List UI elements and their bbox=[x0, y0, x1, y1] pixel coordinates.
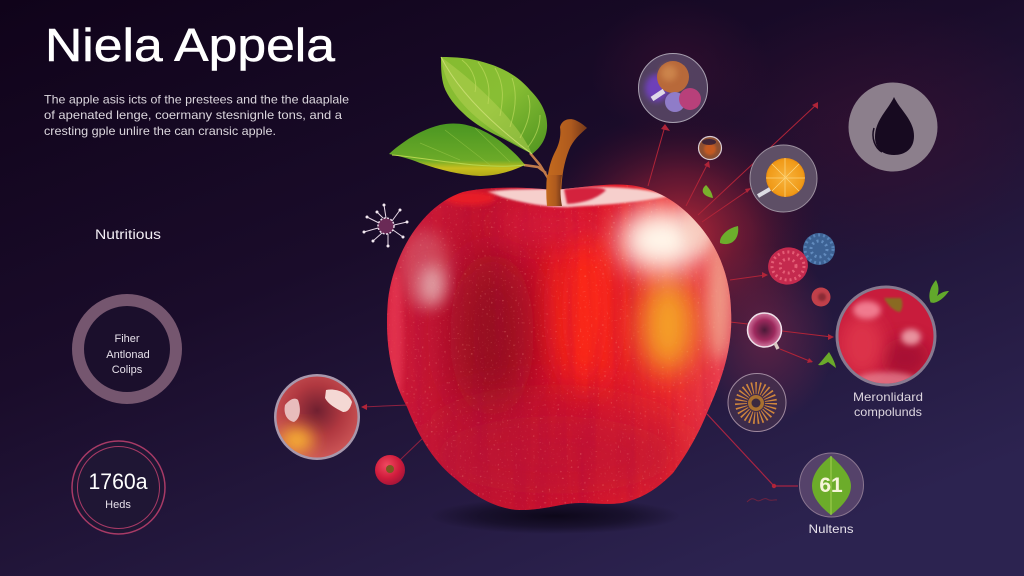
bubble: cells bbox=[638, 54, 708, 122]
badge: leaf 61 bbox=[800, 453, 864, 517]
leaf: middle bbox=[720, 226, 738, 244]
label: compounds bbox=[853, 390, 923, 419]
bubble: spiky cell bbox=[728, 374, 786, 432]
small red fruit bbox=[375, 455, 405, 485]
ring: nutrient list: Antlonad bbox=[106, 349, 150, 361]
leaf: lower bbox=[389, 123, 525, 176]
leaf: apple sprig bbox=[929, 280, 949, 303]
leaf: top bbox=[703, 185, 713, 198]
ring: nutrient list: Fiher bbox=[114, 333, 140, 345]
intro text block: cresting gple unlire the can cransic apple. bbox=[44, 124, 276, 138]
icon: water drop bbox=[848, 82, 938, 172]
small fruit bbox=[812, 288, 830, 306]
stem bbox=[547, 119, 587, 206]
bubble: berry cell bbox=[748, 313, 782, 349]
ring: stat bbox=[72, 441, 165, 534]
ring: nutrient list bbox=[78, 300, 176, 398]
apple: red cavity bbox=[564, 187, 606, 204]
bubble: orange bbox=[750, 145, 817, 212]
connector arrows bbox=[361, 102, 834, 502]
ring: stat: Heds bbox=[105, 499, 131, 511]
raspberry bbox=[764, 243, 812, 289]
apple: top lip highlight bbox=[487, 187, 670, 207]
small leaves bbox=[703, 185, 949, 368]
molecule icon bbox=[362, 204, 408, 248]
label: compounds: compolunds bbox=[854, 405, 922, 419]
berries bbox=[764, 233, 835, 289]
intro text block: of apenated lenge, coermany stesnignle tons, and a bbox=[44, 108, 342, 122]
bubble: apple bbox=[836, 286, 936, 388]
title: Niela Appela bbox=[45, 19, 335, 71]
intro text block: The apple asis icts of the prestees and the the daaplale bbox=[44, 92, 349, 106]
bubble: small cell bbox=[698, 136, 722, 160]
main apple bbox=[380, 180, 740, 515]
label: nutrients: Nultens bbox=[808, 522, 854, 536]
leaf: twig bbox=[524, 153, 548, 178]
badge: leaf 61: 61 bbox=[819, 474, 843, 497]
leaf: upper bbox=[441, 57, 547, 154]
stem base over apple bbox=[546, 175, 562, 206]
intro text block bbox=[44, 92, 349, 138]
leaves bbox=[389, 57, 548, 178]
leaf: lower right bbox=[818, 352, 836, 368]
label: compounds: Meronlidard bbox=[853, 390, 923, 404]
bubble: textured sphere bbox=[274, 374, 360, 460]
blueberry bbox=[803, 233, 835, 265]
label: Nutritious: Nutritious bbox=[95, 227, 161, 242]
apple: red shoulder bbox=[444, 191, 496, 205]
ring: nutrient list: Colips bbox=[112, 364, 143, 376]
ring: stat: 1760a bbox=[88, 469, 148, 494]
